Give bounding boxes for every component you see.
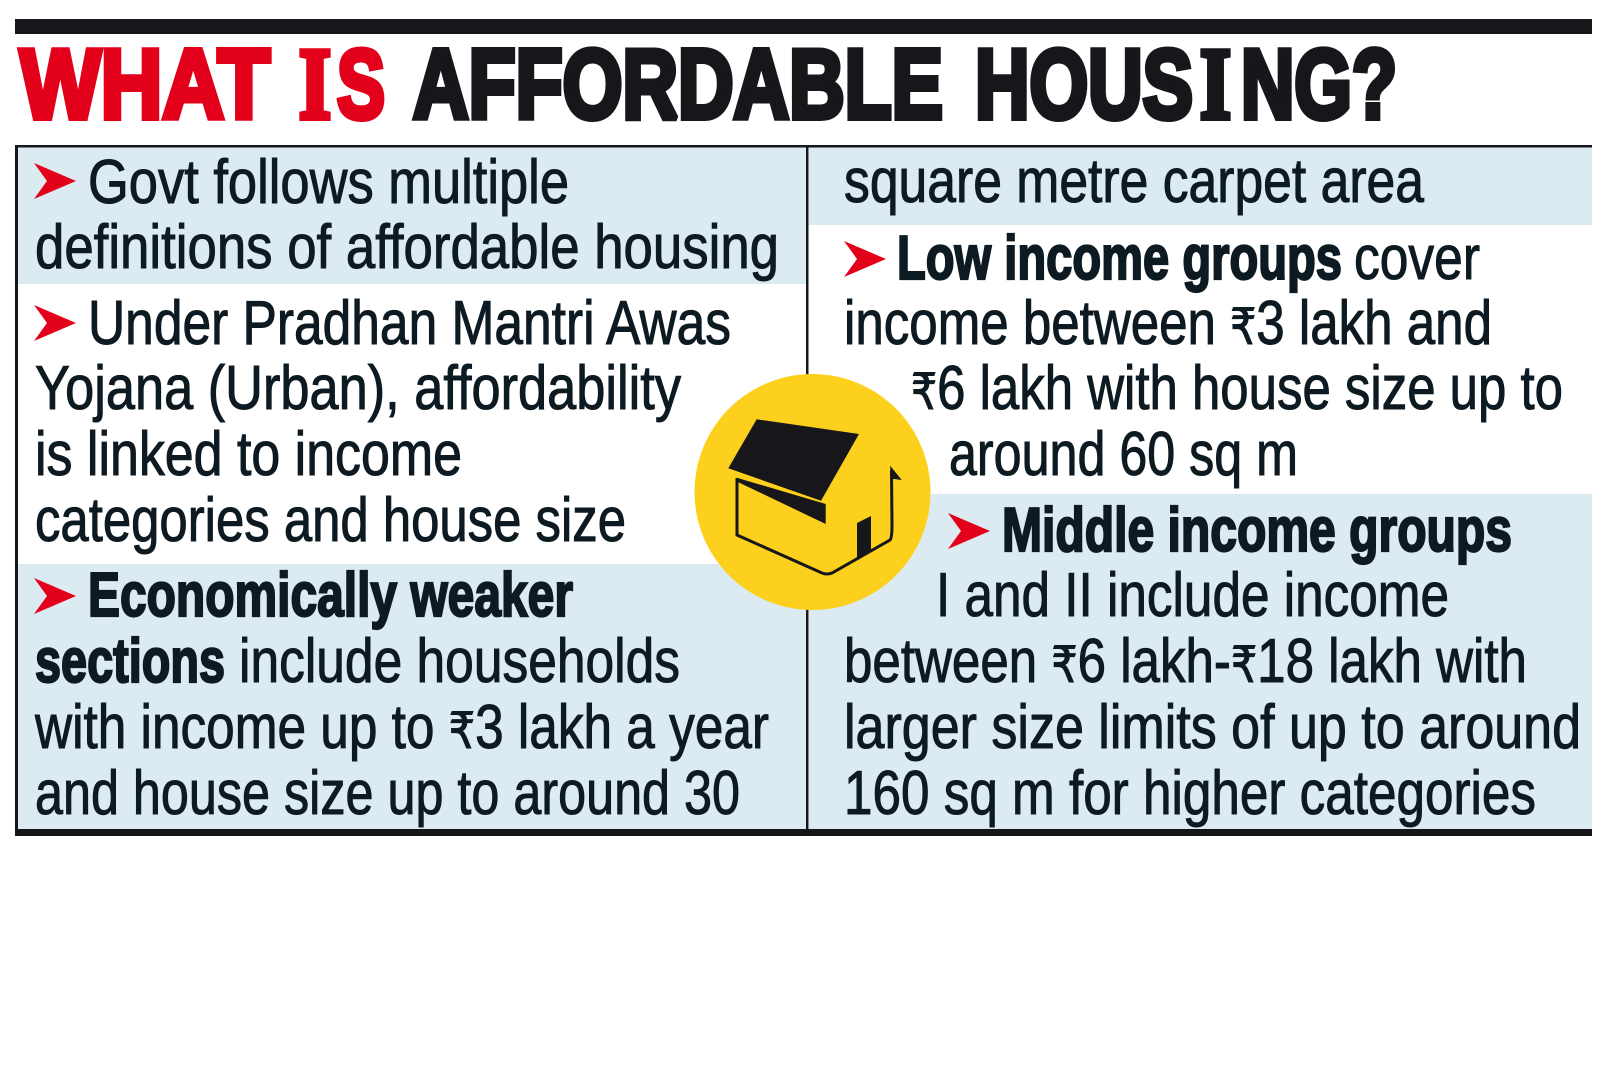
point: economically weaker sections: Economically weaker <box>88 561 573 630</box>
title: WHAT <box>20 29 270 139</box>
point: EWS continuation: square metre carpet area <box>844 147 1424 216</box>
panel: right column <box>844 147 1581 828</box>
title: AFFORDABLE <box>413 29 943 139</box>
icon: house in yellow circle <box>694 374 930 610</box>
title: I <box>1200 28 1231 141</box>
point: economically weaker sections: sections <box>35 627 225 696</box>
point: PMAY urban: is linked to income <box>35 420 462 489</box>
point: low income groups: income between ₹3 lakh and <box>844 289 1492 358</box>
point: low income groups: Low income groups <box>897 224 1342 293</box>
title <box>20 28 1397 141</box>
point: PMAY urban: categories and house size <box>35 486 626 555</box>
title: NG? <box>1241 29 1397 139</box>
point: PMAY urban: Under Pradhan Mantri Awas <box>88 289 731 358</box>
point: PMAY urban: Yojana (Urban), affordability <box>35 354 681 423</box>
point: multiple definitions <box>34 148 779 282</box>
title: S <box>337 29 385 139</box>
point: economically weaker sections: include households <box>239 627 680 696</box>
point: middle income groups: between ₹6 lakh-₹18 lakh with <box>844 627 1527 696</box>
point: middle income groups <box>844 496 1581 828</box>
point: economically weaker sections: with income up to ₹3 lakh a year <box>34 693 769 762</box>
top rule <box>15 19 1592 34</box>
point: low income groups: cover <box>1354 224 1480 293</box>
point: multiple definitions: Govt follows multiple <box>88 148 569 217</box>
table frame and background bands <box>15 145 1592 836</box>
title: HOUS <box>975 29 1193 139</box>
panel: left column <box>34 148 779 828</box>
point: low income groups: around 60 sq m <box>949 420 1298 489</box>
point: middle income groups: I and II include income <box>936 561 1449 630</box>
point: economically weaker sections <box>34 561 769 828</box>
point: economically weaker sections: and house size up to around 30 <box>35 759 740 828</box>
point: multiple definitions: definitions of affordable housing <box>35 213 779 282</box>
point: low income groups <box>844 224 1563 489</box>
title: I <box>299 28 331 141</box>
point: PMAY urban <box>34 289 731 555</box>
